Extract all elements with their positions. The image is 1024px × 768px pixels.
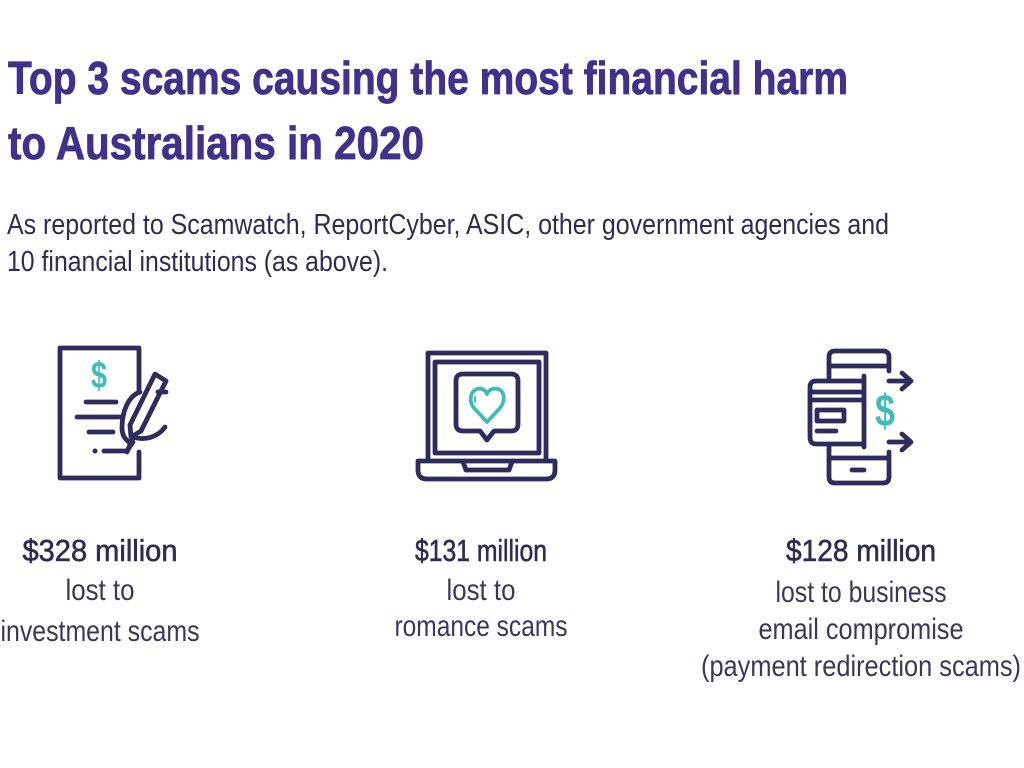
icon: laptop with heart message [418, 353, 555, 479]
stat: romance scams: lost to [446, 574, 516, 607]
stat: business email compromise: email compromise [758, 613, 964, 646]
stat: romance scams [394, 533, 568, 643]
stat: investment scams: investment scams [0, 615, 200, 648]
stat: investment scams: $328 million [22, 533, 178, 568]
subtitle [7, 209, 889, 278]
stat: romance scams: romance scams [394, 610, 568, 643]
icon: phones with dollar and arrows [810, 351, 911, 483]
icon: document with pen: $ [91, 355, 107, 397]
stat: business email compromise: lost to business [776, 576, 946, 609]
subtitle: As reported to Scamwatch, ReportCyber, ASIC, other government agencies and [7, 209, 889, 241]
title: Top 3 scams causing the most financial harm [8, 52, 848, 104]
title [8, 52, 848, 169]
stat: investment scams: lost to [66, 574, 134, 607]
title: to Australians in 2020 [8, 117, 424, 169]
stat: business email compromise [701, 533, 1021, 683]
icon: document with pen [60, 348, 166, 478]
stat: business email compromise: $128 million [786, 533, 936, 568]
subtitle: 10 financial institutions (as above). [7, 246, 388, 278]
stat: investment scams [0, 533, 200, 648]
icon: phones with dollar and arrows: $ [875, 385, 895, 436]
stat: romance scams: $131 million [415, 533, 547, 568]
